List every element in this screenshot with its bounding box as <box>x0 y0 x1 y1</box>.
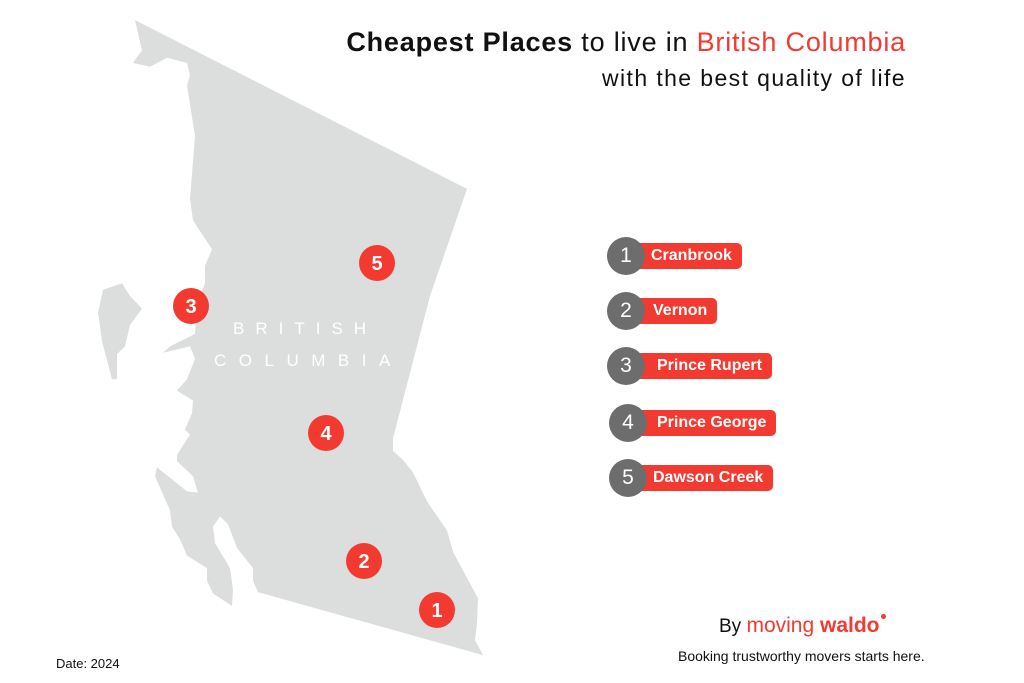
map label: BRITISH <box>233 319 377 338</box>
tagline: Booking trustworthy movers starts here. <box>678 648 925 664</box>
legend item 3 <box>607 347 772 385</box>
map shape <box>98 20 483 655</box>
legend item 3: 3 <box>620 354 632 377</box>
legend item 1: Cranbrook <box>651 247 732 264</box>
map markers: 1 <box>431 600 443 622</box>
map markers: 3 <box>185 296 197 318</box>
legend item 4: Prince George <box>657 414 766 431</box>
legend item 5: Dawson Creek <box>653 469 763 486</box>
map markers: 2 <box>358 551 370 573</box>
map label: COLUMBIA <box>214 351 403 370</box>
legend item 4: 4 <box>622 411 634 434</box>
legend item 2: 2 <box>620 299 632 322</box>
legend item 1 <box>607 237 742 275</box>
legend item 5: 5 <box>622 466 634 489</box>
legend <box>607 237 776 497</box>
subtitle: with the best quality of life <box>602 65 906 91</box>
map markers: 4 <box>320 423 332 445</box>
legend item 4 <box>609 404 776 442</box>
legend item 1: 1 <box>620 244 632 267</box>
legend item 2 <box>607 292 717 330</box>
map markers <box>173 245 455 628</box>
legend item 5 <box>609 459 773 497</box>
map label <box>214 319 403 370</box>
legend item 3: Prince Rupert <box>657 357 762 374</box>
map markers: 5 <box>371 253 383 275</box>
title: Cheapest Places to live in British Columbia <box>346 27 906 57</box>
legend item 2: Vernon <box>653 302 707 319</box>
brand logo: By moving waldo <box>719 614 880 637</box>
date: Date: 2024 <box>56 656 120 671</box>
